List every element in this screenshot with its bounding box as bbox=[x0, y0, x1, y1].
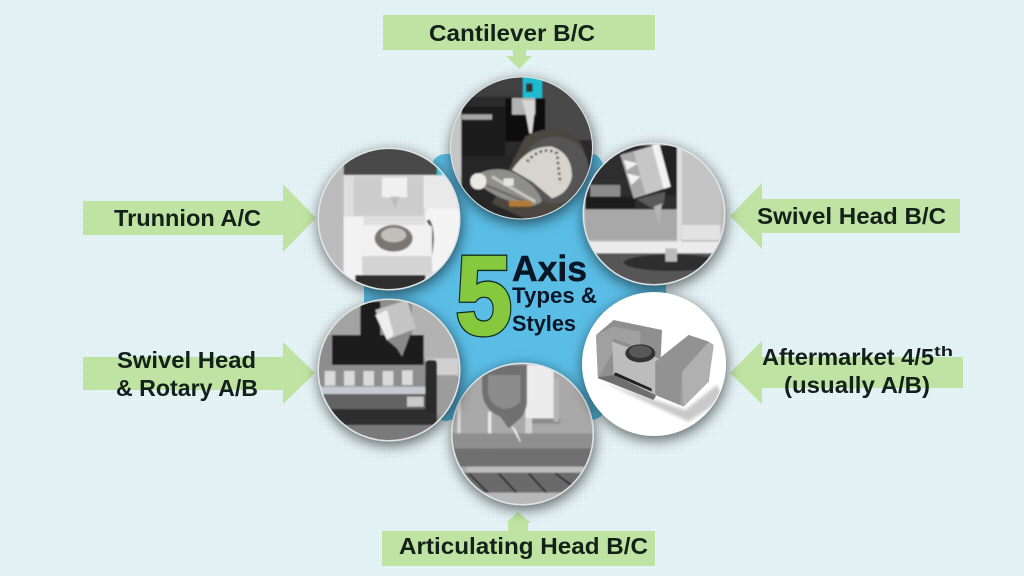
photo circle: cantilever bbox=[445, 73, 599, 223]
icon: table shadow bbox=[602, 382, 724, 422]
arrow banner: Aftermarket 4/5th: (usually A/B) bbox=[784, 372, 930, 398]
photo circle: articulating head bbox=[445, 358, 602, 512]
arrow banner: Aftermarket 4/5th: th bbox=[934, 343, 953, 359]
arrow banner: Aftermarket 4/5th: Aftermarket 4/5 bbox=[762, 344, 934, 370]
arrow banner: Swivel Head and Rotary A/B: Swivel Head bbox=[117, 347, 256, 373]
arrow banner: Swivel Head B/C bbox=[730, 183, 960, 249]
icon: rotary table machine bbox=[596, 320, 714, 407]
title: 5 Axis Types and Styles bbox=[456, 234, 597, 358]
numeral 5 inner fill: 5 bbox=[456, 234, 512, 358]
photo circle: swivel head and rotary bbox=[315, 297, 462, 445]
word Axis: Axis bbox=[512, 248, 587, 289]
arrow banner: Aftermarket 4/5th bbox=[730, 341, 963, 404]
arrow banner: Cantilever B/C: Cantilever B/C bbox=[429, 20, 595, 46]
photo circle: trunnion bbox=[315, 147, 462, 290]
arrow banner: Articulating Head B/C: Articulating Head B/C bbox=[399, 533, 648, 559]
word Styles: Styles bbox=[512, 311, 576, 336]
arrow banner: Swivel Head and Rotary A/B bbox=[83, 342, 315, 404]
arrow banner: Swivel Head B/C: Swivel Head B/C bbox=[757, 203, 946, 229]
arrow banner: Swivel Head and Rotary A/B: & Rotary A/B bbox=[116, 375, 258, 401]
arrow banner: Trunnion A/C: Trunnion A/C bbox=[114, 205, 261, 231]
numeral 5: 5 bbox=[456, 234, 512, 358]
photo circle: swivel head bbox=[580, 142, 727, 287]
arrow banner: Articulating Head B/C bbox=[382, 512, 655, 566]
arrow banner: Trunnion A/C bbox=[83, 184, 316, 252]
arrow banner: Cantilever B/C bbox=[383, 15, 655, 69]
word Types and: Types & bbox=[512, 283, 597, 308]
central blue hexagon bbox=[364, 154, 666, 421]
photo circle: aftermarket rotary table bbox=[582, 292, 726, 436]
